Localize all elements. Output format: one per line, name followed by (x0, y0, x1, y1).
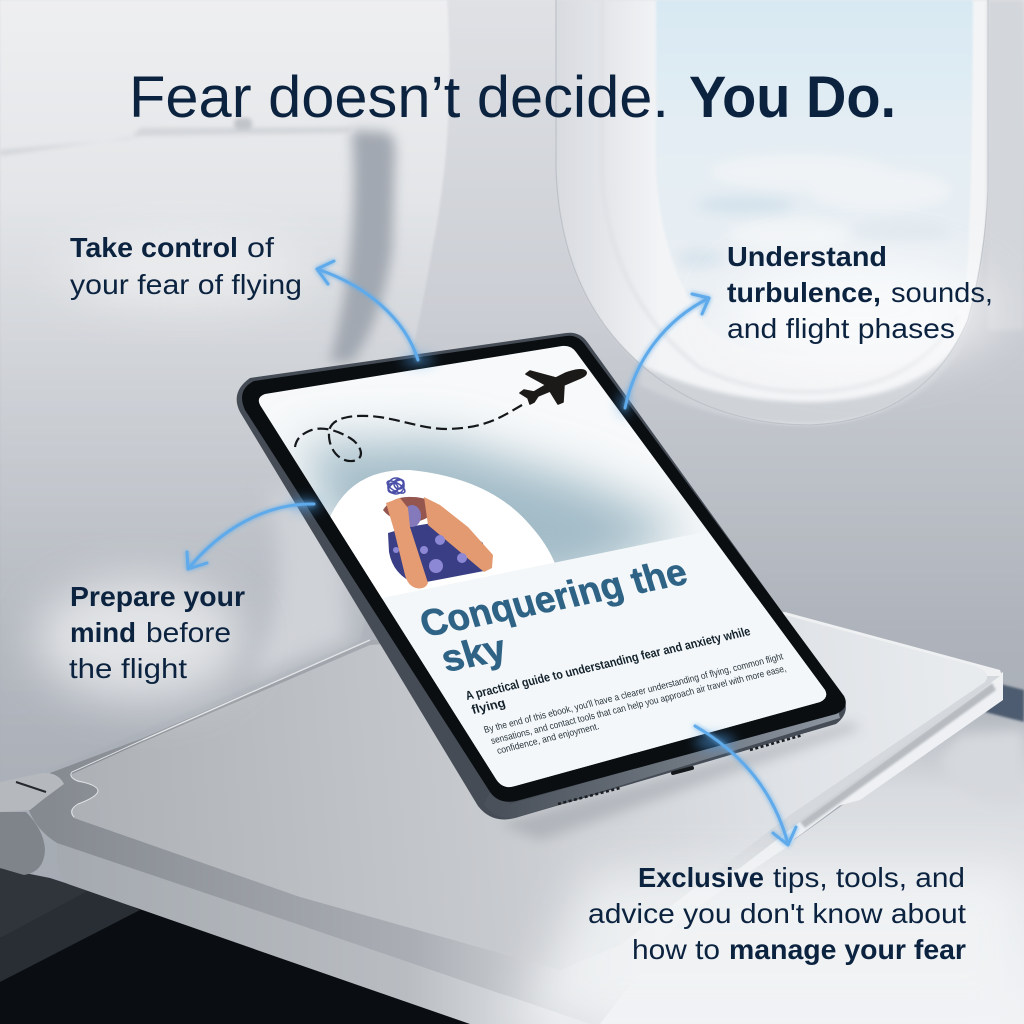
tray top surface (71, 615, 987, 970)
ebook title: Conquering the (415, 552, 692, 646)
label: take control (70, 232, 302, 300)
right arm (424, 497, 493, 572)
dark floor under tray (0, 870, 490, 1024)
speaker grille right (750, 735, 803, 750)
seat pocket rim (0, 888, 140, 982)
tray skirt (57, 843, 590, 1024)
label: exclusive tips: tips, tools, and (773, 862, 965, 893)
seat back (0, 0, 449, 790)
window glass (656, 0, 973, 356)
screen content (295, 370, 840, 800)
airplane icon (520, 370, 586, 404)
illustration: anxious person (383, 478, 493, 588)
glow left (289, 499, 321, 511)
text halos (35, 238, 995, 700)
arrow: understand turbulence (625, 294, 709, 408)
arrow: exclusive tips (695, 726, 796, 845)
halo: left top (60, 238, 310, 306)
arrow: take control (317, 261, 418, 360)
screen sky shading (300, 440, 690, 590)
flight path (295, 405, 522, 461)
halo: left bottom (35, 580, 245, 700)
tray front lip (28, 612, 1002, 1024)
label: prepare your mind: the flight (69, 653, 187, 684)
label: understand turbulence (727, 241, 993, 344)
seat pocket mesh (0, 868, 93, 938)
tray hinge (0, 773, 64, 875)
tablet bezel (242, 336, 846, 802)
label: take control: Take control (70, 232, 238, 263)
right wall edge (988, 0, 1024, 330)
window frame outer line (556, 0, 988, 425)
label: exclusive tips: how to (632, 934, 720, 965)
left arm (386, 498, 428, 588)
seat latch (234, 118, 252, 130)
arrow: prepare your mind (187, 504, 314, 569)
tablet screen (259, 346, 826, 787)
label: prepare your mind: Prepare your (70, 581, 245, 612)
lower seat shading (250, 490, 350, 680)
glow bottom (695, 735, 735, 749)
halo: right (725, 255, 995, 365)
label: exclusive tips (588, 862, 966, 965)
label: take control: your fear of flying (70, 269, 302, 300)
arrow glows on tablet (289, 355, 735, 749)
window frame (556, 0, 988, 425)
title (129, 65, 896, 130)
glow top (402, 355, 434, 365)
tablet (237, 333, 846, 820)
ebook subtitle (464, 624, 752, 717)
face shade (407, 505, 421, 527)
ebook description: By the end of this ebook, you'll have a clearer understanding of flying, common flight (483, 651, 785, 736)
text panel (382, 532, 840, 800)
ebook description: sensations, and contact tools that can help you approach air travel with more ease, (490, 663, 788, 747)
clouds (678, 154, 950, 267)
lower right white fade (520, 870, 1024, 1024)
scribble (385, 478, 407, 495)
label: prepare your mind (69, 581, 245, 684)
tray right rim (690, 676, 1000, 890)
title: You Do. (689, 65, 896, 130)
shirt flowers (393, 535, 467, 573)
tray table (0, 612, 1003, 1024)
label: understand turbulence: and flight phases (727, 313, 955, 344)
label: understand turbulence: turbulence, (727, 277, 881, 308)
ebook title: sky (436, 628, 511, 681)
ebook title (421, 564, 687, 671)
tablet shadow on tray (500, 722, 862, 840)
space below tray, right side (450, 690, 1024, 1024)
label: exclusive tips: manage your fear (729, 934, 966, 965)
label: take control: of (247, 232, 274, 263)
label: exclusive tips: advice you don't know about (588, 898, 966, 929)
seat track bar (985, 684, 1024, 722)
shirt (388, 520, 484, 584)
seat panel fold (0, 127, 352, 156)
tray right rim stripe (800, 683, 996, 828)
illustration blob (325, 470, 556, 600)
window frame rings (602, 0, 958, 392)
charging port (673, 768, 692, 773)
tablet lower edge (484, 710, 840, 818)
label: prepare your mind: before (146, 617, 231, 648)
label: exclusive tips: Exclusive (638, 862, 764, 893)
ebook subtitle: A practical guide to understanding fear and anxiety while (464, 624, 752, 703)
seat back recess shadow (330, 130, 395, 362)
tray recess line (71, 740, 143, 817)
frame lower shading (640, 335, 968, 425)
tray skirt right (640, 672, 1003, 905)
label: understand turbulence: Understand (727, 241, 887, 272)
tray back highlight (143, 640, 370, 740)
label: prepare your mind: mind (70, 617, 136, 648)
tablet metal rim (237, 333, 846, 820)
glow right (619, 392, 629, 416)
ebook subtitle: flying (470, 696, 507, 717)
label: understand turbulence: sounds, (891, 277, 993, 308)
speaker grille left (558, 788, 620, 804)
armrest shadow (940, 730, 1024, 802)
ebook description: confidence, and enjoyment. (496, 721, 601, 757)
title: Fear doesn’t decide. (129, 65, 669, 130)
hair (383, 496, 427, 521)
